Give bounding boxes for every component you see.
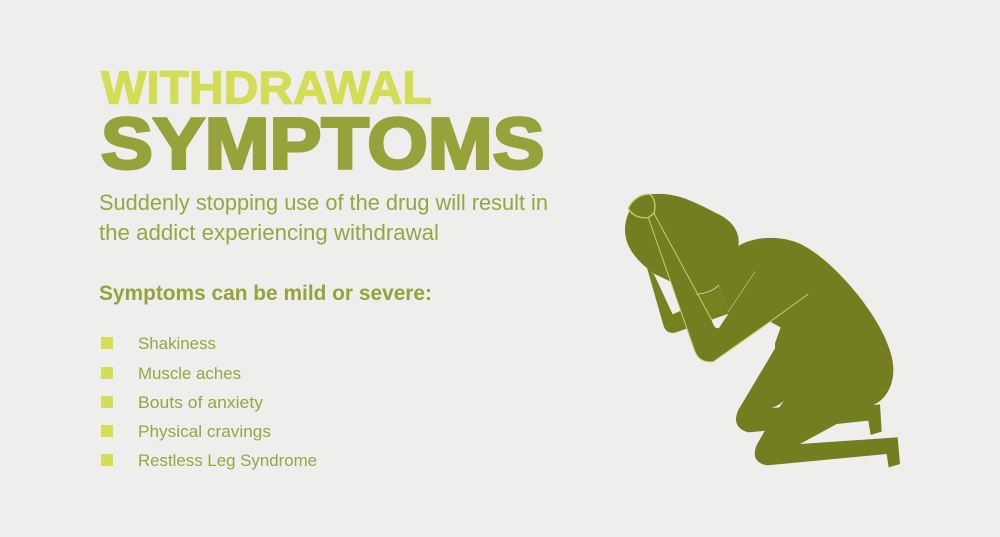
illustration: person kneeling with head in hands bbox=[625, 194, 900, 467]
symptom list bbox=[101, 335, 317, 470]
subheading: Symptoms can be mild or severe: bbox=[99, 282, 432, 305]
gap between the legs bbox=[772, 401, 784, 408]
near hand bbox=[628, 194, 655, 218]
heading: withdrawal symptoms bbox=[101, 61, 545, 184]
title line: symptoms: SYMPTOMS bbox=[101, 103, 545, 184]
rear leg bbox=[736, 347, 787, 432]
list item: physical cravings: Physical cravings bbox=[138, 423, 271, 441]
intro text: the addict experiencing withdrawal bbox=[99, 220, 439, 245]
torso and front leg bbox=[648, 213, 900, 467]
title line: withdrawal: WITHDRAWAL bbox=[101, 61, 432, 113]
hair and head bbox=[625, 194, 757, 294]
far arm bbox=[647, 267, 729, 333]
gap between the arms bbox=[712, 314, 728, 328]
neck fill behind the arm bbox=[718, 257, 755, 313]
intro text bbox=[99, 190, 548, 245]
jaw line highlight bbox=[697, 285, 719, 294]
list item: restless leg syndrome: Restless Leg Syndrome bbox=[138, 452, 317, 470]
list item: bouts of anxiety: Bouts of anxiety bbox=[138, 394, 264, 412]
list item: shakiness bbox=[101, 335, 216, 353]
list item: muscle aches: Muscle aches bbox=[138, 365, 241, 383]
list item: shakiness: Shakiness bbox=[138, 335, 216, 353]
intro text: Suddenly stopping use of the drug will result in bbox=[99, 190, 548, 215]
arm contour lines bbox=[648, 213, 808, 362]
